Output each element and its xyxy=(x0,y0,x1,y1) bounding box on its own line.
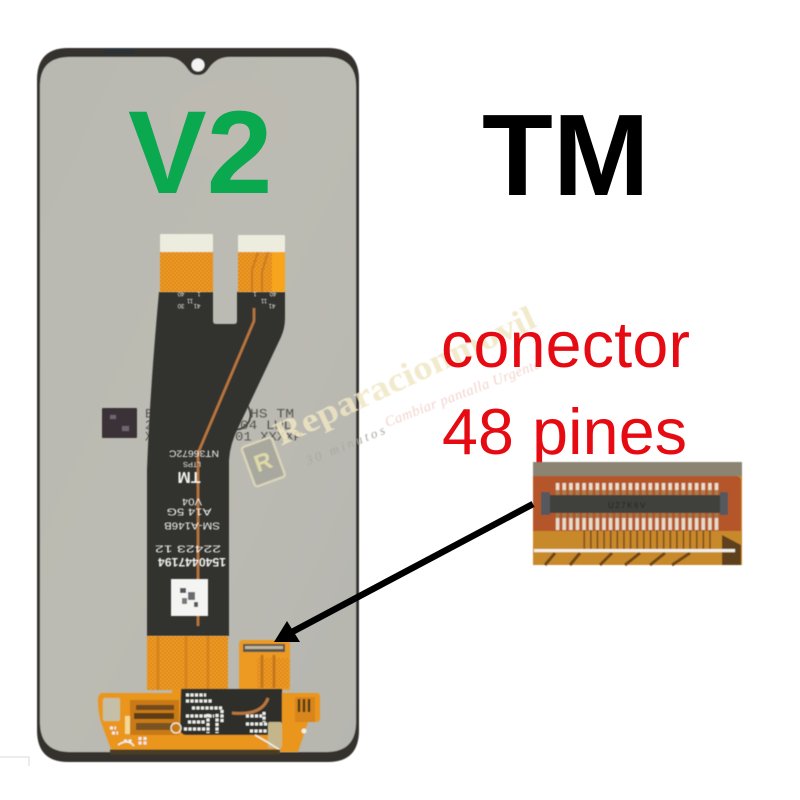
label: conector 48 pines: conector xyxy=(441,309,690,381)
flex markings, printed upside down: 30 xyxy=(177,302,184,308)
lower orange flex tail xyxy=(147,636,228,690)
panel label text printed on the back xyxy=(102,400,302,444)
flex markings, printed upside down: 41 xyxy=(193,302,200,308)
flex markings, printed upside down: 1 xyxy=(197,290,201,296)
right orange connector tail xyxy=(238,235,285,292)
label: conector 48 pines: 48 pines xyxy=(442,396,687,468)
connector close-up photo xyxy=(533,462,742,565)
flex markings, printed upside down: TM xyxy=(177,468,201,485)
flex markings, printed upside down: V04 xyxy=(182,496,202,506)
flex markings, printed upside down: 40 xyxy=(177,290,184,296)
main black flex cable xyxy=(147,292,285,636)
panel label text printed on the back: B0 xyxy=(145,408,161,422)
watermark: Reparacionmovil: Reparacionmovil xyxy=(269,300,542,453)
flex markings, printed upside down: 1 xyxy=(253,290,257,296)
heading: TM: TM xyxy=(482,90,650,220)
watermark: Reparacionmovil xyxy=(241,300,543,487)
flex markings, printed upside down: LTPS xyxy=(183,460,201,469)
flex markings, printed upside down: 41 xyxy=(268,302,275,308)
flex markings, printed upside down: 11 xyxy=(186,297,193,303)
panel label text printed on the back: HS TM xyxy=(250,408,294,422)
heading: V2: V2 xyxy=(128,87,272,219)
board white silkscreen xyxy=(110,695,268,745)
QR code label xyxy=(171,579,208,616)
small orange flex with 48 pin connector xyxy=(239,640,290,690)
arrow pointing to connector xyxy=(274,504,533,642)
flex markings, printed upside down: 22423 12 xyxy=(155,542,221,554)
panel label text printed on the back: 04 LWL xyxy=(240,419,292,433)
label: conector 48 pines xyxy=(441,309,690,468)
flex markings, printed upside down: SM-A146B xyxy=(164,520,220,532)
panel label text printed on the back: 01 XXXXP xyxy=(235,430,302,444)
watermark: Reparacionmovil: Cambiar pantalla Urgente xyxy=(383,356,543,431)
flex copper trace xyxy=(198,308,254,626)
flex markings, printed upside down: 1540447194 xyxy=(157,555,226,567)
flex markings, printed upside down xyxy=(155,290,276,567)
flex markings, printed upside down: NT36672C xyxy=(169,448,219,458)
phone display back panel xyxy=(37,48,359,762)
corner crop mark xyxy=(0,757,29,766)
flex markings, printed upside down: 40 xyxy=(269,290,276,296)
panel label text printed on the back: X xyxy=(145,430,153,444)
watermark: Reparacionmovil: R xyxy=(250,447,276,478)
flex markings, printed upside down: 11 xyxy=(260,297,267,303)
panel label text printed on the back: 2 xyxy=(145,419,153,433)
watermark: Reparacionmovil: 30 minutos xyxy=(303,422,387,468)
connector close-up photo: U27K6V xyxy=(608,501,647,510)
left orange connector tail xyxy=(160,234,213,292)
flex markings, printed upside down: A14 5G xyxy=(166,506,212,516)
bottom driver board xyxy=(98,689,320,752)
